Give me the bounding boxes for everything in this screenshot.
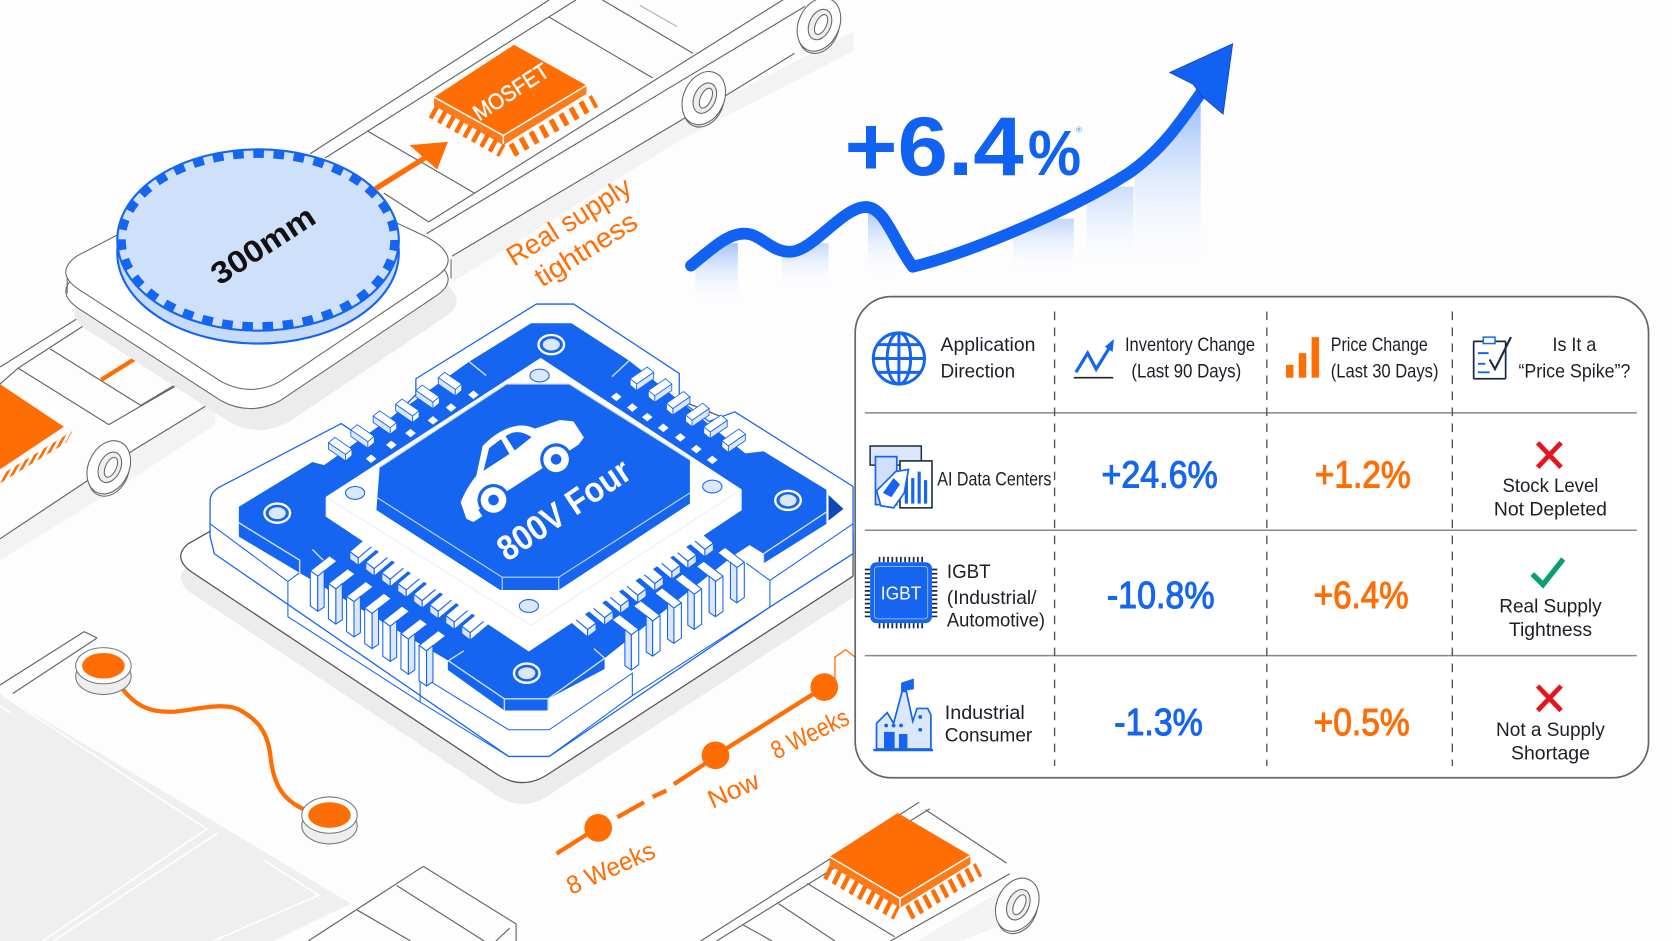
- row: industrial consumer: -1.3%: [1114, 701, 1203, 744]
- row: IGBT: [867, 559, 1602, 641]
- +6.4% headline: %: [1028, 117, 1081, 189]
- timeline nodes: [584, 673, 838, 842]
- row: AI data centers: +24.6%: [1102, 454, 1218, 497]
- timeline labels: 8 Weeks: [562, 837, 660, 900]
- text: Real supply tightness: Real supply: [501, 171, 637, 272]
- orange chip: bottom: [826, 813, 979, 913]
- icon: car: [437, 395, 594, 531]
- row: AI data centers: Stock Level: [1502, 475, 1598, 497]
- timeline: [557, 650, 855, 900]
- timeline labels: Now: [704, 767, 764, 814]
- conveyor: top: [310, 0, 853, 282]
- header: price change: [1331, 334, 1438, 383]
- panel: comparison table: [855, 297, 1649, 778]
- row: IGBT: Automotive): [947, 609, 1045, 631]
- icon: conveyor wheel: [674, 64, 734, 134]
- header: inventory change: [1125, 334, 1255, 383]
- conveyor: bottom right: [701, 802, 1024, 941]
- central chip: [181, 304, 853, 804]
- row: industrial consumer: +0.5%: [1314, 701, 1410, 744]
- row: AI data centers: +1.2%: [1315, 454, 1411, 497]
- header: application direction: [940, 334, 1035, 383]
- pad bevel lines: [239, 361, 826, 711]
- row: IGBT: Tightness: [1509, 619, 1592, 641]
- row: IGBT: Real Supply: [1499, 595, 1602, 617]
- chart bars: [695, 104, 1201, 286]
- conveyor: bottom left: [308, 866, 516, 941]
- chip blue field: [239, 323, 826, 711]
- trend arrow: [691, 44, 1233, 267]
- arrow: wafer to chip: [375, 142, 448, 189]
- row: IGBT: +6.4%: [1314, 574, 1409, 617]
- row: AI data centers: AI Data Centers: [937, 468, 1052, 490]
- icon: globe: [873, 333, 925, 384]
- chip base plate: [181, 341, 853, 804]
- row: AI data centers: Not Depleted: [1494, 498, 1607, 520]
- floor panel bottom-left: [0, 632, 351, 941]
- +6.4% headline: +6.4: [845, 100, 1024, 193]
- header: price change: (Last 30 Days): [1331, 361, 1438, 383]
- lower right pins: [567, 526, 744, 670]
- upper pins: [328, 367, 745, 464]
- icon: red cross: [1538, 443, 1561, 467]
- conveyor: left: [0, 317, 215, 560]
- header: price spike: [1518, 334, 1630, 383]
- icon: conveyor wheel left: [79, 434, 139, 503]
- icon: conveyor wheel bottom: [987, 871, 1047, 940]
- wafer 300mm: [117, 149, 399, 344]
- icon: data center: [870, 446, 932, 508]
- header: inventory change: Inventory Change: [1125, 334, 1255, 356]
- icon: IGBT chip: [867, 560, 935, 626]
- row: IGBT: (Industrial/: [947, 587, 1037, 609]
- wafer stage: [66, 160, 457, 430]
- node bottom: [302, 797, 357, 844]
- +6.4% headline: ®: [1076, 124, 1083, 134]
- header: application direction: Application: [940, 334, 1035, 356]
- icon: IGBT chip: IGBT: [881, 584, 921, 604]
- icon: factory: [873, 679, 933, 750]
- orange chip: left conveyor: [0, 384, 69, 477]
- pointer to table: [829, 495, 843, 521]
- icon: red cross: [1538, 686, 1561, 711]
- icon: green check: [1532, 559, 1563, 585]
- growth chart: [691, 44, 1233, 305]
- row: industrial consumer: Not a Supply: [1496, 719, 1605, 741]
- MOSFET label: MOSFET: [468, 58, 554, 126]
- chip label: 800V Four: [490, 451, 638, 569]
- row: industrial consumer: [873, 679, 1605, 765]
- wafer label: 300mm: [204, 198, 322, 292]
- header: application direction: Direction: [940, 361, 1015, 383]
- lower left pins: [310, 535, 491, 686]
- header: inventory change: (Last 90 Days): [1131, 361, 1241, 383]
- timeline labels: 8 Weeks: [767, 703, 854, 765]
- icon: clipboard: [1474, 337, 1511, 379]
- icon: bar chart: [1286, 337, 1319, 378]
- node top: [76, 648, 131, 695]
- timeline labels: [562, 703, 854, 900]
- row: AI data centers: [870, 443, 1607, 520]
- icon: conveyor wheel: [789, 0, 849, 60]
- chip body outline: [210, 304, 853, 756]
- row: IGBT: -10.8%: [1107, 574, 1215, 617]
- row: IGBT: IGBT: [947, 561, 991, 583]
- header: price spike: “Price Spike”?: [1518, 361, 1630, 383]
- text: Real supply tightness: tightness: [529, 205, 643, 293]
- pad mounting holes: [264, 335, 801, 683]
- header: price spike: Is It a: [1553, 334, 1596, 356]
- row: industrial consumer: Shortage: [1511, 743, 1590, 765]
- +6.4% headline: [845, 100, 1083, 193]
- header: price change: Price Change: [1331, 334, 1428, 356]
- MOSFET chip: [432, 45, 595, 151]
- chip center die: [326, 358, 741, 651]
- node cable: [76, 648, 357, 844]
- row: industrial consumer: Consumer: [945, 724, 1033, 746]
- row: industrial consumer: Industrial: [945, 702, 1025, 724]
- icon: line chart: [1074, 340, 1113, 378]
